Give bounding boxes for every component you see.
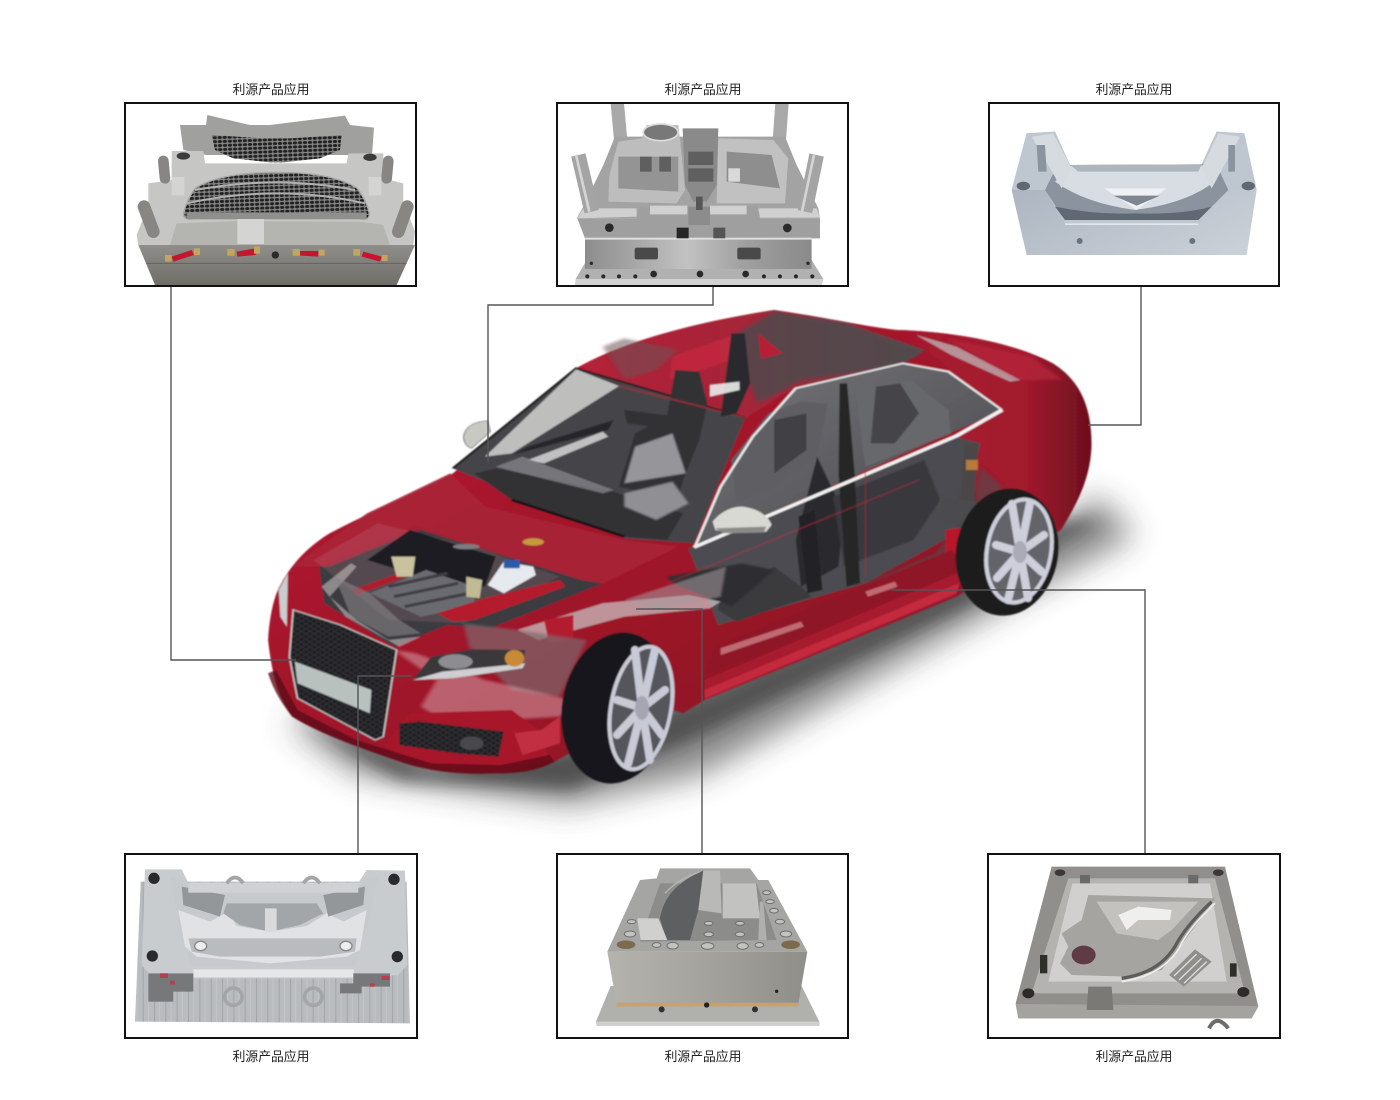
- license plate: [295, 662, 371, 713]
- rear window and spoiler highlight: [916, 335, 1021, 382]
- roof bar and red sash: [619, 386, 745, 417]
- frame: [125, 103, 416, 286]
- front suspension: [464, 567, 726, 697]
- bonnet translucent: [292, 473, 678, 583]
- brass strip: [617, 1003, 798, 1006]
- car illustration: [268, 310, 1135, 805]
- door sill: [705, 550, 970, 677]
- frame: [557, 103, 848, 286]
- rear wheel: [946, 480, 1068, 624]
- rear posts: [617, 103, 782, 140]
- bumper right inset: [514, 717, 560, 755]
- lifting rings: [225, 877, 322, 1005]
- right cavity: [717, 138, 788, 203]
- bumper edge shading: [268, 670, 555, 774]
- holes in base: [585, 262, 814, 278]
- panel: door trim mold: [988, 854, 1280, 1038]
- lower seat cushion: [718, 567, 812, 622]
- tire: [946, 480, 1068, 624]
- outer frame: [1016, 867, 1258, 1018]
- rear suspension: [935, 443, 983, 557]
- upper body: [577, 137, 820, 218]
- connector: top-left panel to grille: [171, 286, 296, 660]
- inner floor: [1032, 878, 1245, 993]
- dashboard: [474, 468, 683, 540]
- centre channel: [683, 128, 718, 202]
- connector: top-right panel to rear bumper: [1088, 286, 1141, 425]
- front bumper translucent: [394, 650, 581, 723]
- frame: [125, 854, 417, 1038]
- car drawing: [268, 310, 1091, 792]
- front grille: [183, 172, 369, 219]
- centre block: [688, 207, 710, 225]
- lifting eye: [1209, 1021, 1228, 1028]
- body shell: [268, 310, 1091, 774]
- centre block: [698, 871, 722, 913]
- front posts: [578, 155, 817, 212]
- belt line chrome: [694, 410, 1002, 547]
- contact shadow: [290, 520, 1100, 790]
- front passenger seat: [731, 402, 828, 503]
- windshield glass frame: [453, 368, 745, 468]
- lower face: [170, 221, 390, 245]
- slide block: [1087, 987, 1113, 1010]
- heading: bottom-centre: 利源产品应用: [665, 1049, 741, 1064]
- guide posts: [144, 161, 407, 232]
- corner holes: [1055, 869, 1065, 876]
- connector: bottom-centre panel to dashboard: [636, 609, 702, 854]
- panel: instrument panel mold: [557, 103, 848, 286]
- dark red boss: [1072, 946, 1096, 964]
- fog lamp grille: [399, 722, 504, 757]
- block front: [607, 952, 807, 1004]
- heading: top-left: 利源产品应用: [233, 82, 309, 97]
- side window interior: [695, 363, 1002, 547]
- top surface: [607, 868, 807, 952]
- roof transparent section: [731, 312, 924, 403]
- heading: top-right: 利源产品应用: [1096, 82, 1172, 97]
- left mirror: [464, 421, 490, 448]
- rear grille cavity: [212, 135, 342, 162]
- side wings: [1032, 133, 1072, 188]
- main grille: [289, 610, 397, 740]
- middle plate: [137, 151, 415, 245]
- lower rail: [193, 969, 354, 977]
- rib plate: [1169, 949, 1212, 987]
- panel: pillar mold block: [557, 854, 848, 1038]
- top frame: [142, 869, 407, 978]
- corner bolts: [148, 873, 160, 884]
- frame: [557, 854, 848, 1038]
- windshield interior: [453, 369, 745, 543]
- heading: bottom-left: 利源产品应用: [233, 1049, 309, 1064]
- red door lines: [667, 480, 919, 583]
- front face top: [578, 218, 820, 238]
- panel: front bumper mold: [125, 854, 417, 1038]
- window frame chrome: [695, 363, 1002, 547]
- engine: [322, 530, 565, 647]
- base plate: [596, 986, 819, 1026]
- frame: [988, 854, 1280, 1038]
- rear seat: [855, 380, 951, 467]
- left cavity: [608, 125, 685, 203]
- rim: [601, 642, 681, 774]
- headlamp left edge: [279, 573, 288, 627]
- roof: [576, 310, 924, 418]
- tire: [550, 624, 684, 792]
- heading: bottom-right: 利源产品应用: [1096, 1049, 1172, 1064]
- front wheel: [550, 624, 684, 792]
- connector: bottom-right panel to door: [892, 590, 1145, 854]
- red hoses: [172, 248, 382, 262]
- heading: top-centre: 利源产品应用: [665, 82, 741, 97]
- door xray: [689, 437, 981, 625]
- side mechanisms: [148, 973, 193, 1002]
- headlight: [413, 649, 525, 680]
- pillars: [839, 383, 860, 587]
- car body cutaway: [268, 310, 1091, 774]
- panel: grille mold: [125, 103, 416, 286]
- cavity floor: [640, 883, 777, 942]
- right block: [723, 883, 760, 918]
- door panel raised shape: [1060, 895, 1215, 977]
- side pockets: [1040, 955, 1047, 973]
- panel: rear bumper mold: [989, 103, 1279, 286]
- roof red highlight near windshield: [670, 335, 734, 380]
- bolts: [624, 891, 792, 949]
- connector: top-centre panel to windshield: [488, 286, 713, 462]
- engine bay: [319, 527, 603, 647]
- top rim: [1012, 132, 1257, 223]
- rear mold half: [180, 115, 374, 160]
- right mirror: [713, 507, 772, 533]
- rear quarter panel: [897, 330, 1091, 530]
- frame: [989, 103, 1279, 286]
- curved core: [660, 871, 703, 940]
- ground shadow: [282, 495, 1135, 805]
- connector: bottom-left panel to front bumper: [358, 676, 412, 854]
- corner holes: [1017, 182, 1030, 190]
- base plate: [135, 882, 410, 1023]
- bumper cavity: [170, 877, 378, 967]
- front seat: [619, 370, 707, 500]
- base plate: [575, 252, 823, 285]
- cavity: [1045, 164, 1228, 220]
- left block: [637, 918, 667, 940]
- mold body: [1012, 132, 1257, 255]
- rim: [978, 494, 1060, 608]
- middle block: [585, 238, 812, 269]
